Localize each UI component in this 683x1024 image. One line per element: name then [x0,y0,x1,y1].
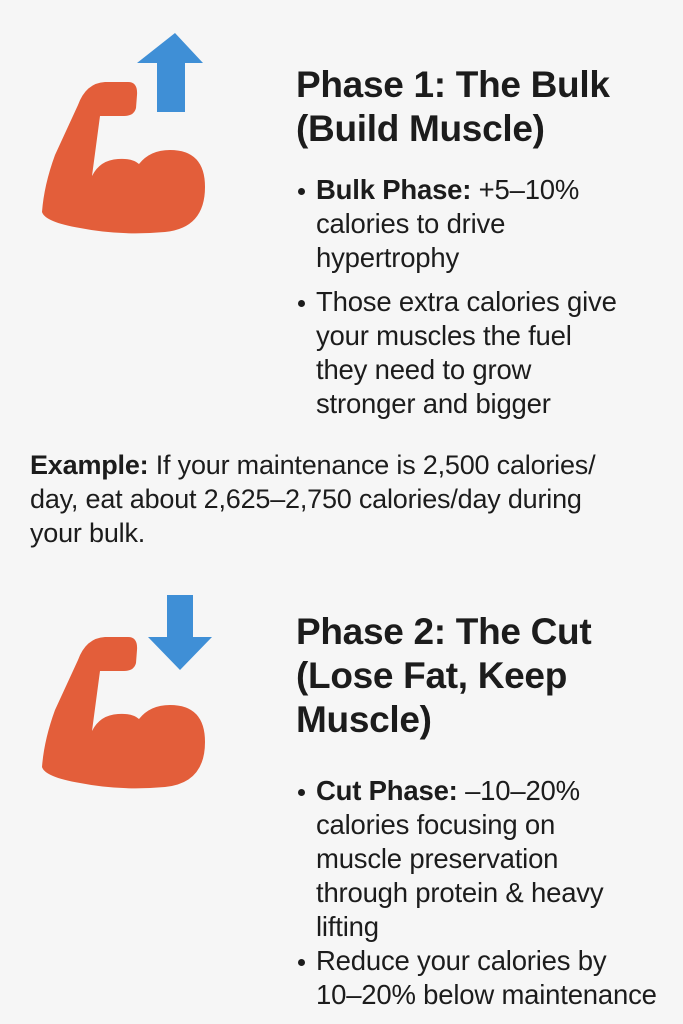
text: example: your bulk. [30,518,145,548]
bullet: bulk phase: calories to drive [316,208,505,239]
heading: phase 2 [296,611,592,740]
heading: phase 1: (Build Muscle) [296,108,545,149]
text: example: day, eat about 2,625–2,750 calories/day during [30,484,582,514]
bullet: extra calories: they need to grow [316,354,531,385]
bullet: extra calories: stronger and bigger [316,388,551,419]
bullet: reduce calories: 10–20% below maintenance [316,979,657,1010]
bullet: extra calories [298,285,617,421]
icon: up arrow [137,33,203,112]
bullet: reduce calories: Reduce your calories by [316,945,606,976]
text: example [30,450,596,548]
bullet: cut phase: Cut Phase: –10–20% [316,775,580,806]
bullet: extra calories: Those extra calories give [316,286,617,317]
heading: phase 2: Phase 2: The Cut [296,611,591,652]
bullet: cut phase: calories focusing on [316,809,555,840]
icon: flexed arm with up arrow [42,33,205,234]
bullet: bulk phase: Bulk Phase: +5–10% [316,174,579,205]
bullet: reduce calories [298,944,657,1012]
heading: phase 1 [296,64,610,149]
bullet: bulk phase [298,173,579,275]
bullet: extra calories: your muscles the fuel [316,320,572,351]
bullet: cut phase [298,774,603,944]
heading: phase 2: Muscle) [296,699,432,740]
heading: phase 1: Phase 1: The Bulk [296,64,610,105]
bullet: cut phase: lifting [316,911,379,942]
heading: phase 2: (Lose Fat, Keep [296,655,567,696]
text: example: Example: If your maintenance is 2,500 calories/ [30,450,595,480]
bullet: cut phase: through protein & heavy [316,877,603,908]
bullet: cut phase: muscle preservation [316,843,558,874]
icon: muscle arm [42,637,205,788]
icon: down arrow [148,595,212,670]
icon: flexed arm with down arrow [42,595,212,788]
bullet: bulk phase: hypertrophy [316,242,459,273]
icon: muscle arm [42,82,205,233]
